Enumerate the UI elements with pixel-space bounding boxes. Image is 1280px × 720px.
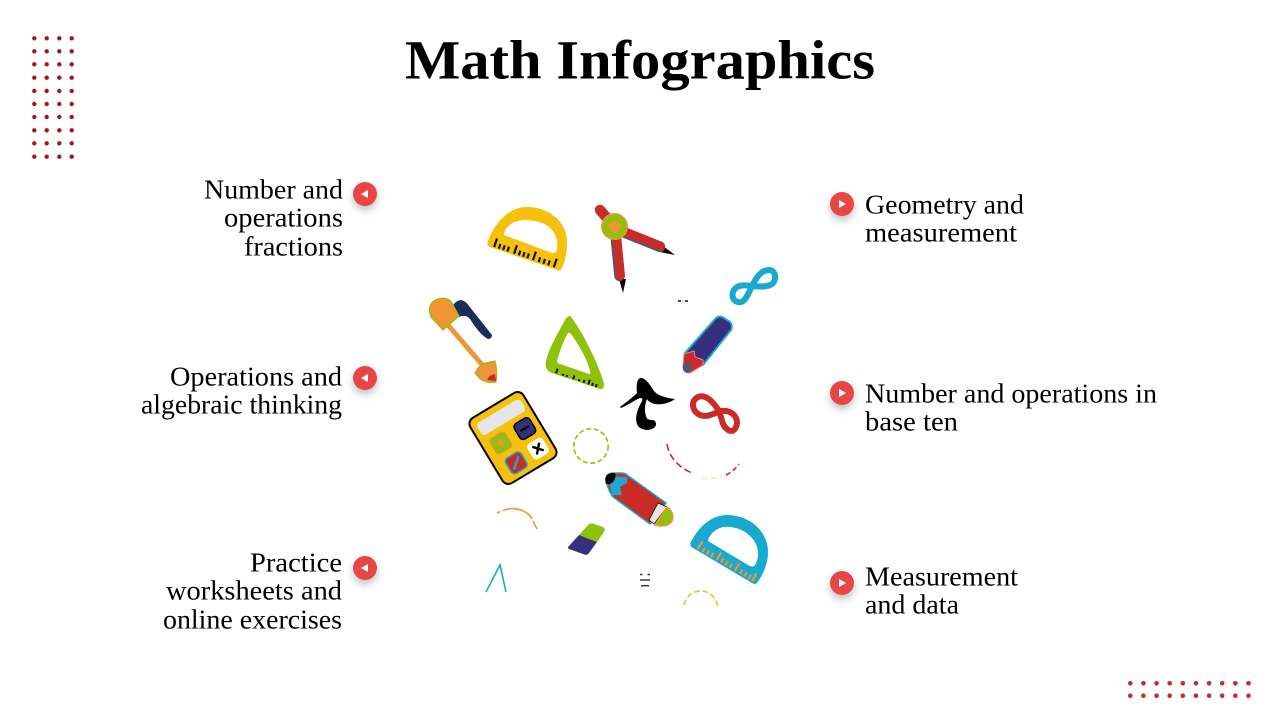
icon: right bullet 2 <box>830 381 854 405</box>
label: number and operations in base ten: base ten <box>865 406 959 436</box>
icon: calculator <box>467 389 559 487</box>
label: number and operations fractions: operations <box>224 202 343 232</box>
label: operations and algebraic thinking: algebraic thinking <box>141 390 342 420</box>
label: practice worksheets and online exercises: online exercises <box>163 604 342 634</box>
label: geometry and measurement <box>865 190 1025 248</box>
icon: blue infinity <box>733 270 775 302</box>
label: measurement and data: Measurement <box>865 562 1019 592</box>
label: operations and algebraic thinking: Operations and <box>170 362 343 392</box>
label: geometry and measurement: Geometry and <box>865 190 1025 220</box>
label: number and operations in base ten <box>865 378 1158 436</box>
label: operations and algebraic thinking <box>141 362 343 420</box>
dot grid: top left <box>32 36 74 159</box>
label: practice worksheets and online exercises: Practice <box>250 548 342 578</box>
label: practice worksheets and online exercises <box>163 548 343 634</box>
label: measurement and data <box>865 562 1019 620</box>
icon: green set square <box>546 316 604 389</box>
icon: dashed orange arc <box>497 509 537 529</box>
icon: yellow protractor <box>487 207 567 270</box>
icon: left bullet 1 <box>353 182 377 206</box>
icon: red infinity <box>693 396 737 431</box>
icon: dashed yellow arc <box>684 591 718 607</box>
icon: left bullet 3 <box>353 556 377 580</box>
icon: blue pencil <box>683 316 732 373</box>
label: measurement and data: and data <box>865 590 959 620</box>
icon: red pencil <box>605 473 673 526</box>
label: practice worksheets and online exercises: worksheets and <box>166 576 343 606</box>
dot grid: bottom right <box>1128 681 1251 698</box>
icon: blue angle mark <box>486 565 506 592</box>
icon: small purple mark <box>678 300 688 302</box>
icon: orange digging tool <box>430 298 497 383</box>
icon: eraser <box>568 524 605 555</box>
label: number and operations in base ten: Number and operations in <box>865 378 1158 408</box>
icon: blue protractor <box>690 515 768 584</box>
icon: small purple lines <box>640 574 650 586</box>
minus button <box>512 416 537 441</box>
icon: compass <box>600 210 675 293</box>
label: geometry and measurement: measurement <box>865 218 1018 248</box>
title: Math Infographics <box>405 30 875 90</box>
icon: right bullet 1 <box>830 192 854 216</box>
icon: dashed red arc <box>667 444 739 479</box>
icon: dashed green circle <box>574 429 608 463</box>
divide button <box>504 451 529 475</box>
icon: pi symbol <box>620 378 675 430</box>
icon: right bullet 3 <box>830 571 854 595</box>
label: number and operations fractions <box>204 174 344 262</box>
calculator display <box>476 398 527 436</box>
label: number and operations fractions: fractions <box>244 232 343 262</box>
label: number and operations fractions: Number and <box>204 174 344 204</box>
plus button <box>488 431 513 455</box>
icon: left bullet 2 <box>353 366 377 390</box>
multiply button <box>526 436 550 461</box>
